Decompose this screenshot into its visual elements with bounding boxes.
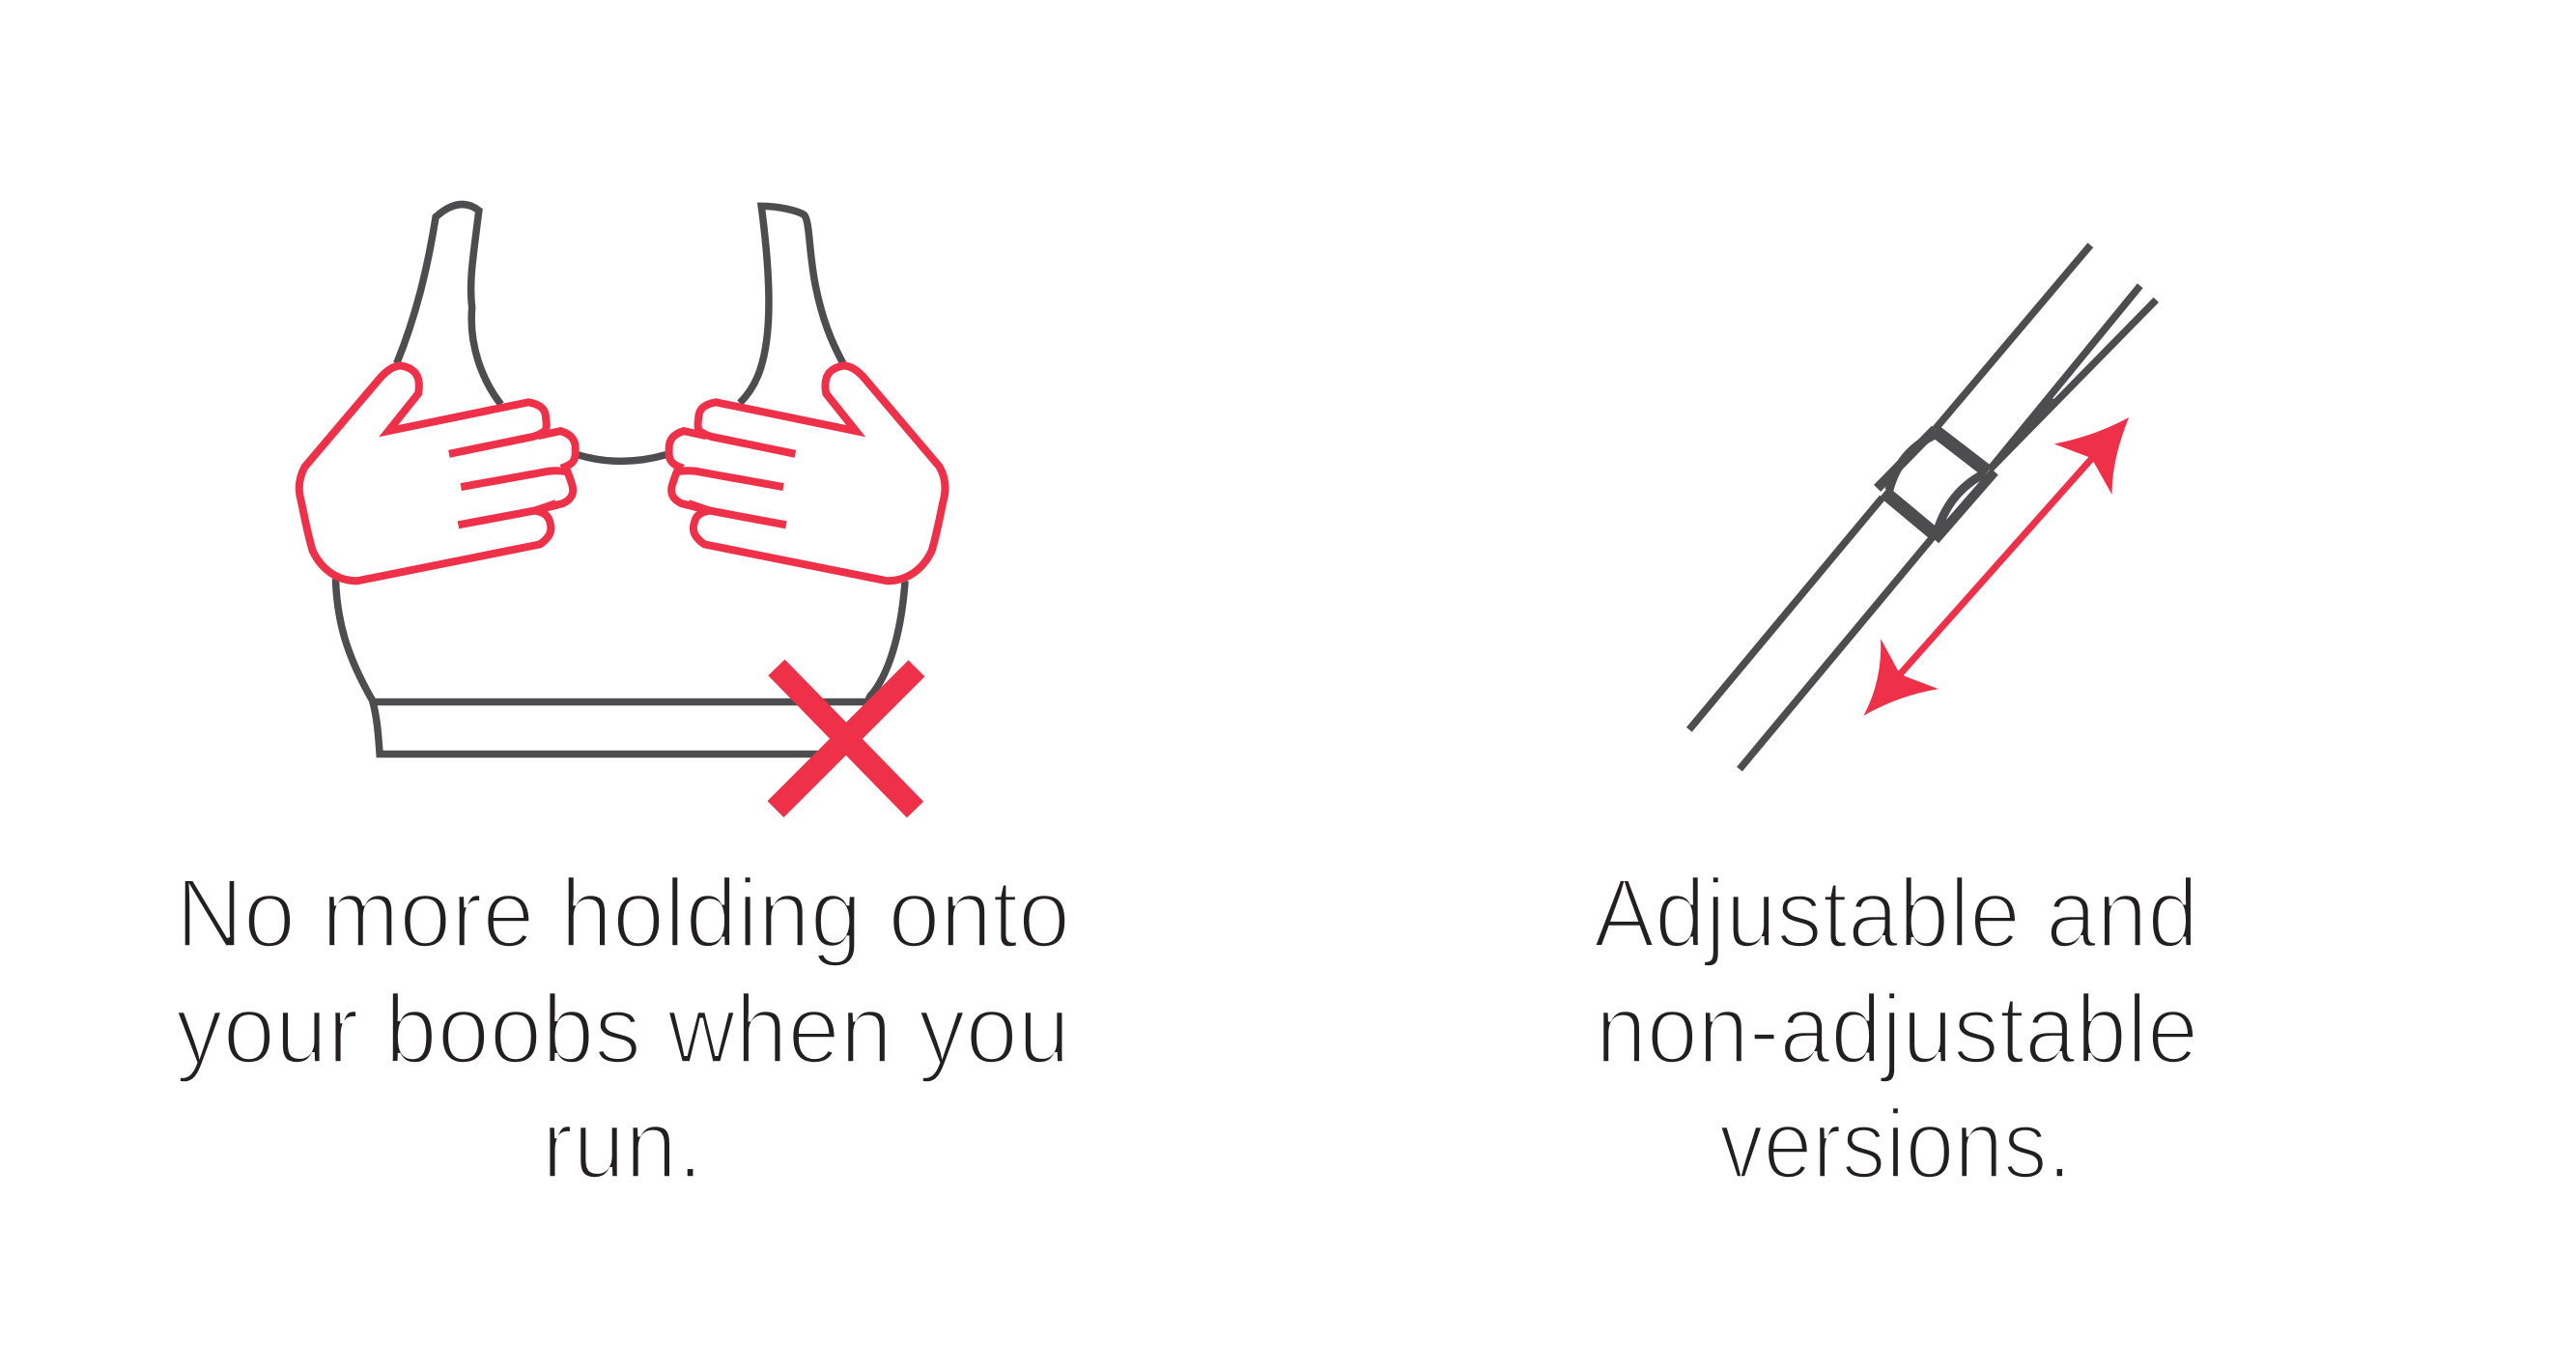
caption: left: run. — [542, 1091, 703, 1199]
bra outline — [335, 204, 905, 754]
icon: red cross — [776, 668, 917, 810]
icon: sports bra held by hands with red cross — [299, 204, 946, 810]
caption: left: your boobs when you — [176, 976, 1070, 1084]
double-headed arrow — [1863, 417, 2129, 716]
right hand — [669, 365, 946, 581]
caption: left: No more holding onto — [176, 860, 1070, 968]
caption: left — [176, 860, 1070, 1199]
caption: right: Adjustable and — [1594, 860, 2198, 968]
caption: right: versions. — [1719, 1091, 2072, 1199]
strap lines and buckle — [1689, 245, 2156, 769]
left hand — [299, 365, 576, 581]
caption: right — [1594, 860, 2198, 1199]
icon: adjustable strap with double arrow — [1689, 245, 2156, 769]
caption: right: non-adjustable — [1596, 976, 2198, 1084]
